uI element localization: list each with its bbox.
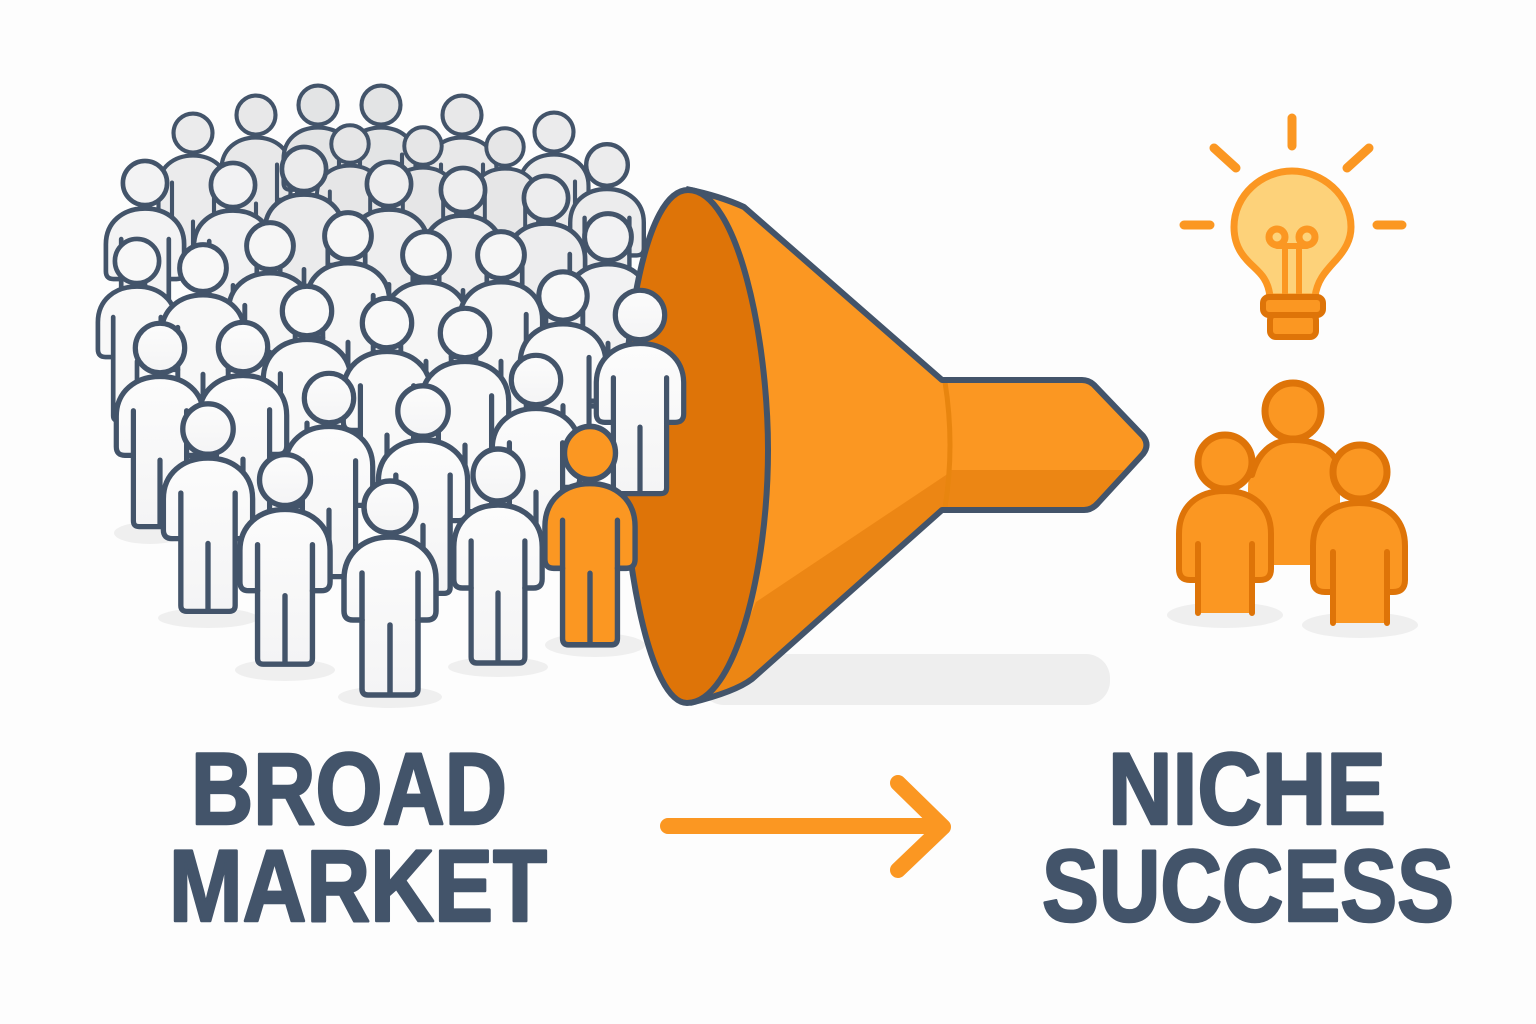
center person — [1248, 440, 1340, 565]
funnel ground shadow — [700, 654, 1110, 705]
right person — [1313, 503, 1405, 623]
label: niche success: SUCCESS — [1042, 829, 1454, 943]
ground shadows under the crowd — [114, 522, 645, 708]
icon: light bulb — [1184, 118, 1402, 337]
funnel outline — [686, 189, 1146, 703]
icon: niche group of people — [1167, 383, 1418, 638]
label: niche success: NICHE — [1108, 732, 1386, 846]
bulb base — [1270, 314, 1316, 337]
left person — [1179, 491, 1271, 613]
funnel lower shade — [695, 470, 1124, 702]
arrow — [668, 783, 943, 870]
bulb rays — [1184, 118, 1402, 225]
label: broad market: MARKET — [169, 829, 547, 943]
funnel body — [686, 189, 1146, 703]
label: broad market — [169, 732, 547, 943]
funnel neck seam — [945, 382, 950, 508]
front white person — [596, 290, 684, 494]
funnel mouth — [623, 190, 768, 703]
label: broad market: BROAD — [191, 732, 507, 846]
label: niche success — [1042, 732, 1454, 943]
funnel — [623, 189, 1146, 703]
orange highlighted person — [545, 426, 635, 645]
bulb filament — [1277, 246, 1307, 297]
bulb glass — [1234, 171, 1351, 297]
group shadows — [1167, 602, 1283, 628]
crowd of white people — [98, 86, 649, 695]
